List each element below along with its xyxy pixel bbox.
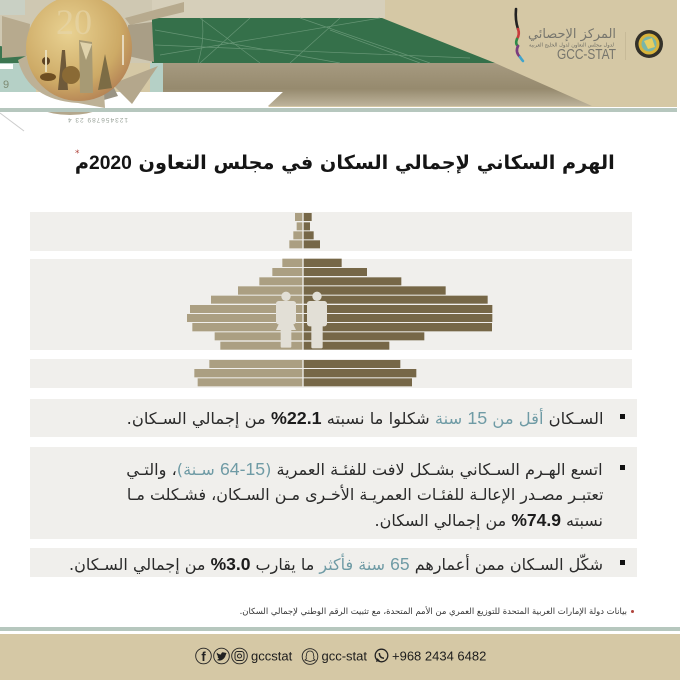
- handle: gccstat: gccstat: [251, 648, 293, 664]
- header banner: [0, 0, 677, 132]
- text line 3: نسبته 74.9% من إجمالي السكان.: [374, 510, 603, 530]
- logo text: المركز الإحصائي: [528, 27, 616, 42]
- logo text: لدول مجلس التعاون لدول الخليج العربية: [529, 42, 614, 48]
- icon: facebook: [196, 648, 211, 664]
- icon: snapchat: [302, 649, 318, 664]
- bullet: [620, 414, 625, 419]
- female bars: [187, 213, 302, 386]
- bullet: [620, 560, 625, 565]
- panel: 15-64: [30, 447, 637, 539]
- logo text: GCC-STAT: [557, 47, 616, 63]
- panel: 65+: [30, 548, 637, 577]
- footnote marker: [631, 610, 634, 613]
- icon: GCC emblem: [635, 30, 663, 58]
- population pyramid: [30, 212, 632, 388]
- green band: [150, 18, 495, 63]
- text line: السـكان أقل من 15 سنة شكلوا ما نسبته 22.1% من إجمالي السـكان.: [126, 408, 603, 428]
- title: الهرم السكاني لإجمالي السكان في مجلس التعاون 2020م: [75, 151, 615, 174]
- male bars: [304, 213, 492, 386]
- icon: facebook: f: [201, 649, 206, 664]
- text line 1: اتسع الهـرم السـكاني بشـكل لافت للفئـة العمرية (15-64 سـنة)، والتـي: [127, 459, 603, 479]
- icon: instagram: [232, 648, 247, 664]
- logo: rainbow stroke: [516, 9, 523, 61]
- handle: gcc-stat: gcc-stat: [322, 648, 367, 664]
- icon: whatsapp: [375, 649, 388, 662]
- social icons and contacts: [195, 648, 486, 665]
- footer band: [0, 634, 680, 680]
- photo circle: [26, 0, 132, 101]
- header banner: 123456789 23 4: [67, 116, 128, 123]
- phone number: +968 2434 6482: [392, 648, 486, 664]
- footer rule: [0, 627, 680, 631]
- icon: twitter: [214, 648, 229, 664]
- text line 2: تعتبـر مصـدر الإعالـة للفئـات العمريـة الأخـرى مـن السـكان، فشـكلت مـا: [126, 485, 603, 504]
- icon: woman silhouette: [276, 292, 296, 348]
- light rule: [0, 108, 677, 112]
- icon: man silhouette: [307, 292, 327, 348]
- asterisk: *: [75, 149, 80, 159]
- panel: under 15: [30, 399, 637, 437]
- text line: شكّل السـكان ممن أعمارهم 65 سنة فأكثر ما يقارب 3.0% من إجمالي السـكان.: [69, 554, 603, 574]
- photo circle: 20: [56, 2, 92, 42]
- left mosaic: [0, 0, 184, 115]
- bullet: [620, 465, 625, 470]
- scattered numerals: 9: [3, 79, 9, 91]
- footnote: بيانات دولة الإمارات العربية المتحدة للتوزيع العمري من الأمم المتحدة، مع تثبيت الرقم الوطني لإجمالي السكان.: [240, 606, 627, 616]
- logo text: [528, 27, 616, 63]
